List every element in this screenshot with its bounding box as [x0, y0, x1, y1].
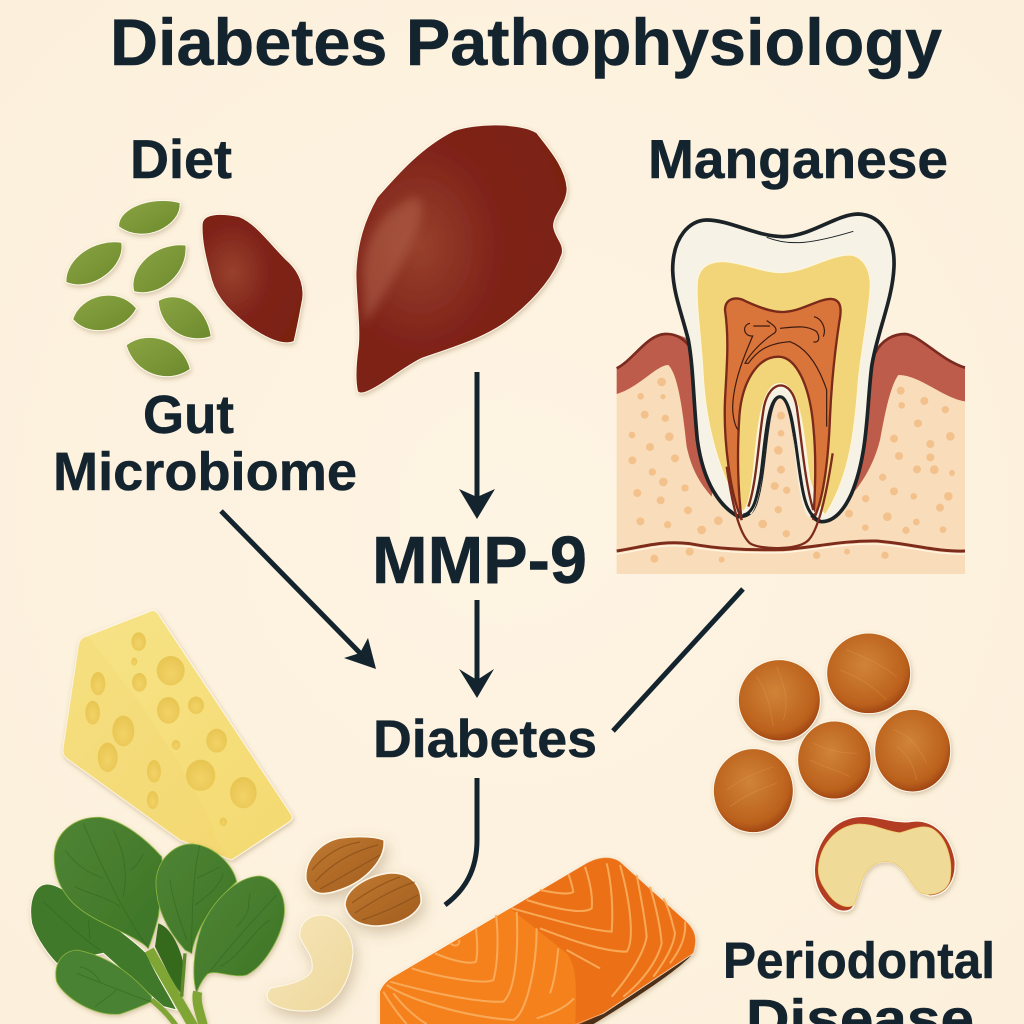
right leaf: [194, 876, 284, 993]
icon: spinach leaves: [31, 817, 284, 1024]
label: MMP-9: MMP-9: [372, 523, 587, 598]
icon: pumpkin seeds: [66, 200, 211, 377]
icon: salmon fillet: [380, 858, 696, 1024]
nerves in pulp: [733, 317, 827, 430]
label: Gut Microbiome: [53, 385, 357, 502]
arrow: MMP-9 to Diabetes: [459, 600, 494, 698]
bottom leaf: [56, 950, 152, 1014]
arrow: liver to MMP-9: [459, 372, 495, 519]
icon: almonds: [306, 837, 421, 926]
leaf veins: [43, 823, 277, 1007]
back left leaf: [31, 884, 177, 1010]
arrow: gut microbiome to Diabetes: [221, 511, 376, 669]
diagram: tooth cross-section: [617, 214, 965, 574]
label: Manganese: Manganese: [648, 128, 948, 190]
enamel crease: [767, 231, 853, 243]
dark centre leaf: [155, 923, 183, 997]
label: Periodontal Disease: Periodontal: [723, 932, 995, 989]
root loop and membrane line: [617, 453, 965, 554]
label: Diabetes: Diabetes: [373, 710, 597, 769]
pulp: [725, 298, 841, 520]
inner root arch: [748, 394, 812, 515]
icon: cashew (right, with skin): [814, 816, 955, 911]
stems: [149, 950, 203, 1024]
title: Diabetes Pathophysiology: [110, 5, 942, 79]
arrow: Diabetes to periodontal curve: [445, 778, 477, 905]
icon: small liver: [202, 214, 303, 343]
bone with speckles: [617, 357, 965, 574]
label: Gut Microbiome: Gut: [143, 385, 234, 445]
enamel: [673, 214, 894, 522]
gums: [617, 334, 965, 500]
arrow: manganese line to Diabetes: [613, 589, 743, 731]
centre leaf: [156, 844, 237, 953]
label: Periodontal Disease: [723, 932, 995, 1024]
icon: cashew (lower): [267, 915, 353, 1011]
top leaf: [54, 817, 162, 948]
icon: large liver: [356, 125, 567, 393]
label: Gut Microbiome: Microbiome: [53, 442, 357, 502]
icon: hazelnuts: [713, 633, 951, 833]
dentin: [697, 255, 870, 515]
label: Diet: Diet: [130, 128, 232, 190]
icon: cheese wedge: [63, 611, 292, 860]
